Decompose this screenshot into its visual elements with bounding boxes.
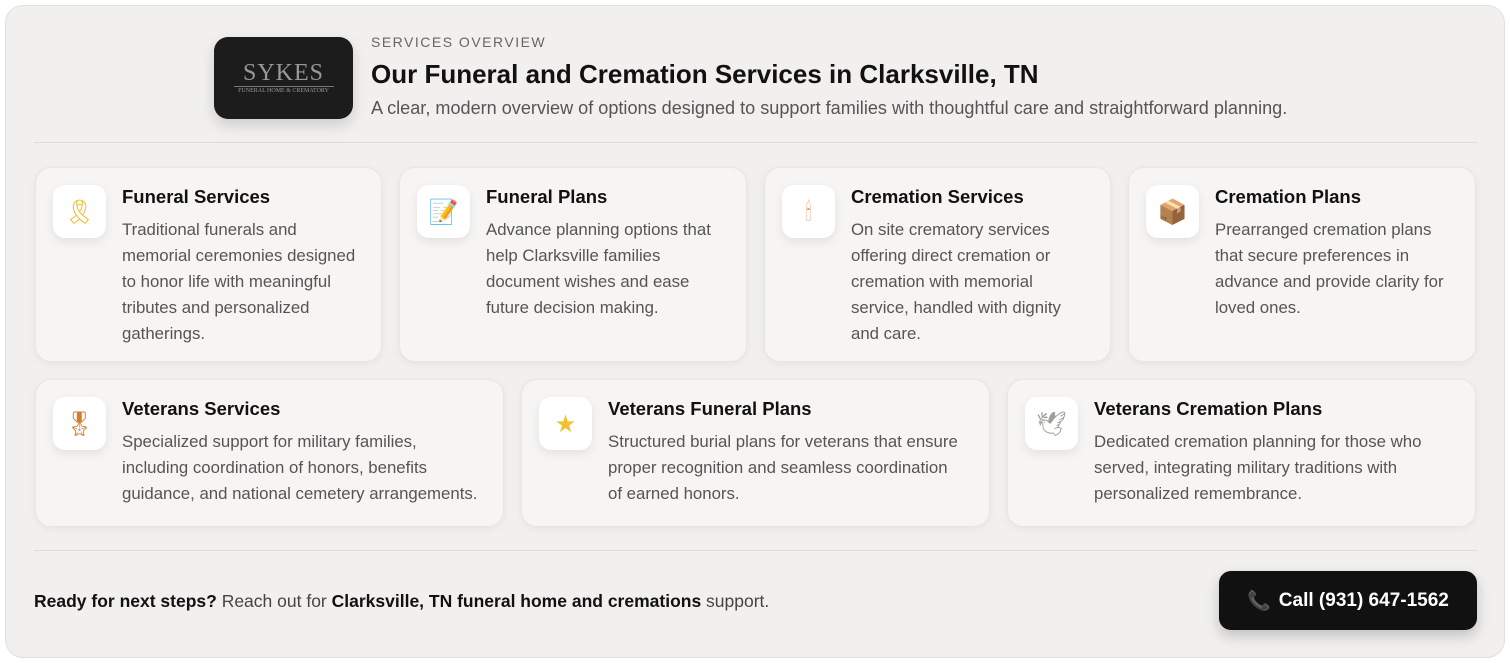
card: Veterans Funeral Plans: Structured burial plans for veterans that ensure [608, 432, 958, 451]
card: Veterans Cremation Plans: Veterans Cremation Plans [1094, 398, 1322, 419]
card: Veterans Services [35, 379, 504, 527]
title: Our Funeral and Cremation Services in Clarksville, TN [371, 59, 1039, 89]
card: Veterans Services: 🎖 [64, 410, 95, 438]
subtitle: A clear, modern overview of options designed to support families with thoughtful care and straightforward planning. [371, 98, 1287, 118]
logo: SYKES [243, 60, 324, 86]
card: Funeral Services: 🎗 [64, 198, 95, 226]
card: Funeral Plans: document wishes and ease [486, 272, 689, 291]
card: Veterans Cremation Plans: served, integrating military traditions with [1094, 458, 1397, 477]
card: Cremation Plans: that secure preferences in [1215, 246, 1409, 265]
logo [214, 37, 353, 119]
card: Funeral Services: gatherings. [122, 324, 205, 343]
call button: 📞 [1247, 590, 1271, 612]
card: Veterans Services: including coordination of honors, benefits [122, 458, 427, 477]
card: Funeral Plans: Funeral Plans [486, 186, 607, 207]
card: Funeral Services: tributes and personalized [122, 298, 310, 317]
card: Veterans Services: Veterans Services [122, 398, 280, 419]
card: Funeral Plans: 📝 [429, 198, 458, 226]
card: Funeral Plans: Advance planning options that [486, 220, 711, 239]
card: Cremation Services: service, handled with dignity [851, 298, 1061, 317]
card: Funeral Services: Funeral Services [122, 186, 270, 207]
card: Funeral Plans: help Clarksville families [486, 246, 660, 265]
eyebrow: SERVICES OVERVIEW [371, 34, 546, 50]
card: Cremation Services [764, 167, 1111, 362]
card: Veterans Services: guidance, and national cemetery arrangements. [122, 484, 477, 503]
card: Cremation Plans: Cremation Plans [1215, 186, 1361, 207]
card: Veterans Cremation Plans: Dedicated cremation planning for those who [1094, 432, 1421, 451]
card: Veterans Funeral Plans: ★ [555, 410, 576, 438]
call button: Call (931) 647-1562 [1279, 590, 1449, 610]
card: Funeral Services: to honor life with meaningful [122, 272, 331, 291]
card: Cremation Plans: 📦 [1158, 198, 1187, 226]
card: Cremation Services: Cremation Services [851, 186, 1024, 207]
card: Cremation Services: and care. [851, 324, 921, 343]
card: Funeral Services: Traditional funerals and [122, 220, 297, 239]
card: Cremation Services: On site crematory services [851, 220, 1050, 239]
card: Cremation Plans: loved ones. [1215, 298, 1301, 317]
footer text: Ready for next steps? Reach out for Clarksville, TN funeral home and cremations support. [34, 591, 769, 611]
card: Funeral Plans: future decision making. [486, 298, 659, 317]
card: Cremation Plans: Prearranged cremation plans [1215, 220, 1431, 239]
card: Cremation Services: offering direct cremation or [851, 246, 1050, 265]
card: Funeral Services: memorial ceremonies designed [122, 246, 355, 265]
card: Funeral Services [35, 167, 382, 362]
card: Veterans Funeral Plans: Veterans Funeral Plans [608, 398, 812, 419]
card: Cremation Services: cremation with memorial [851, 272, 1033, 291]
card: Cremation Plans: advance and provide clarity for [1215, 272, 1444, 291]
card: Veterans Funeral Plans [521, 379, 990, 527]
card: Veterans Services: Specialized support for military families, [122, 432, 417, 451]
card: Cremation Services: 🕯 [805, 198, 812, 226]
card: Cremation Plans [1128, 167, 1476, 362]
logo: FUNERAL HOME & CREMATORY [238, 88, 329, 94]
card: Funeral Plans [399, 167, 747, 362]
card: Veterans Cremation Plans: 🕊 [1036, 410, 1067, 438]
card: Veterans Funeral Plans: of earned honors. [608, 484, 740, 503]
card: Veterans Funeral Plans: proper recognition and seamless coordination [608, 458, 948, 477]
call button [1219, 571, 1477, 630]
card: Veterans Cremation Plans [1007, 379, 1476, 527]
card: Veterans Cremation Plans: personalized remembrance. [1094, 484, 1302, 503]
